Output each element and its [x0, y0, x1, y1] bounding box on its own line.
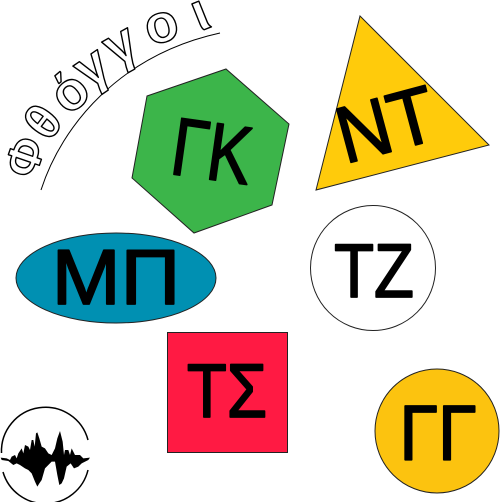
hexagon: ΓΚ: ΓΚ — [166, 100, 258, 202]
circle: ΤΖ — [310, 206, 436, 330]
curved title: Φθόγγοι: γ — [92, 11, 147, 78]
square: ΤΣ — [168, 332, 288, 452]
title arc — [41, 33, 220, 190]
ellipse: ΜΠ — [16, 233, 216, 323]
curved title: Φθόγγοι — [0, 0, 220, 190]
triangle: ΝΤ: ΝΤ — [327, 69, 445, 181]
circle: ΓΓ: ΓΓ — [399, 390, 477, 477]
square: ΤΣ: ΤΣ — [187, 349, 267, 434]
curved title: Φθόγγοι: θ — [13, 94, 73, 150]
circle: ΤΖ: ΤΖ — [334, 229, 414, 314]
curved title: Φθόγγοι: γ — [62, 33, 120, 100]
triangle: ΝΤ — [316, 16, 489, 190]
ellipse: ΜΠ: ΜΠ — [52, 234, 180, 321]
icon: sound wave in circle — [1, 407, 90, 502]
curved title: Φθόγγοι: ό — [38, 58, 101, 126]
circle: ΓΓ — [375, 369, 499, 493]
hexagon: ΓΚ — [132, 69, 289, 233]
